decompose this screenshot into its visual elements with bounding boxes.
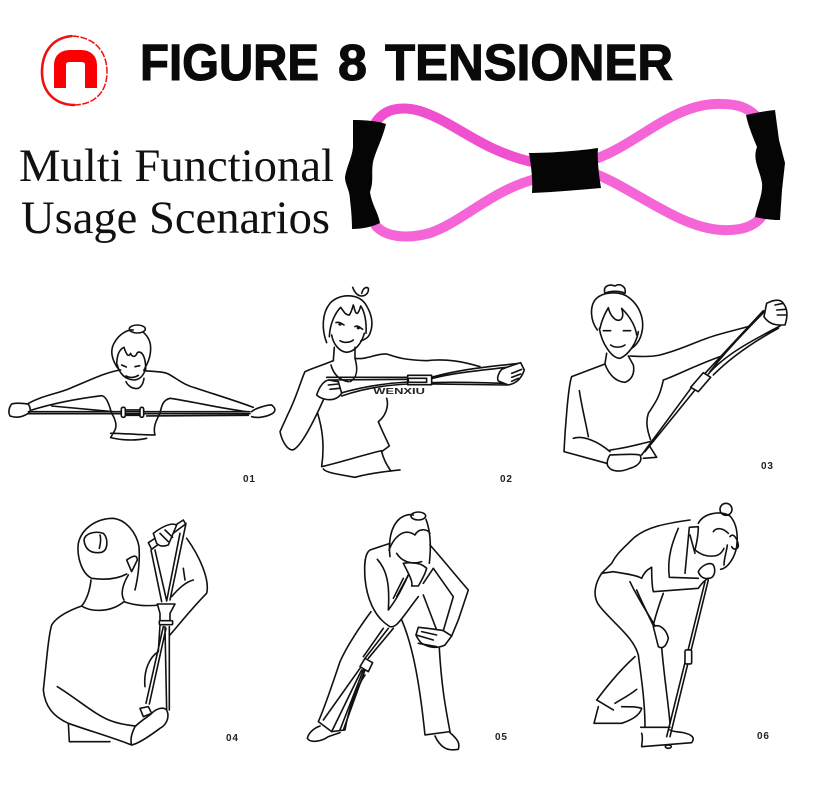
band brand text: WENXIU bbox=[373, 386, 425, 396]
step number: 01 bbox=[243, 474, 256, 485]
figure: diagonal pull with band bbox=[564, 285, 787, 471]
icon: brand logo bbox=[42, 36, 107, 105]
step number: 02 bbox=[500, 474, 513, 485]
exercise 02 bbox=[280, 287, 524, 485]
step number: 06 bbox=[757, 731, 770, 742]
figure: arms spread with band bbox=[9, 325, 275, 440]
exercise 01 bbox=[9, 325, 275, 485]
exercise 05 bbox=[307, 512, 508, 750]
exercise 03 bbox=[564, 285, 787, 472]
step number: 03 bbox=[761, 461, 774, 472]
subtitle: Multi Functional bbox=[19, 140, 334, 192]
figure: behind the back stretch bbox=[43, 518, 207, 745]
subtitle bbox=[19, 140, 334, 244]
figure: chest stretch with band bbox=[280, 287, 524, 477]
subtitle: Usage Scenarios bbox=[21, 192, 330, 244]
title: 8 bbox=[338, 34, 367, 91]
pink tube bbox=[376, 104, 762, 237]
title: TENSIONER bbox=[385, 34, 673, 91]
figure: bent over row with band bbox=[594, 503, 738, 748]
exercise 04 bbox=[43, 518, 239, 745]
black foam grips bbox=[345, 110, 785, 229]
exercise 06 bbox=[594, 503, 770, 748]
step number: 04 bbox=[226, 733, 239, 744]
title: FIGURE bbox=[140, 34, 319, 91]
figure 8 band product bbox=[345, 104, 785, 237]
step number: 05 bbox=[495, 732, 508, 743]
figure: side lean with band under foot bbox=[307, 512, 468, 750]
title bbox=[140, 34, 673, 91]
